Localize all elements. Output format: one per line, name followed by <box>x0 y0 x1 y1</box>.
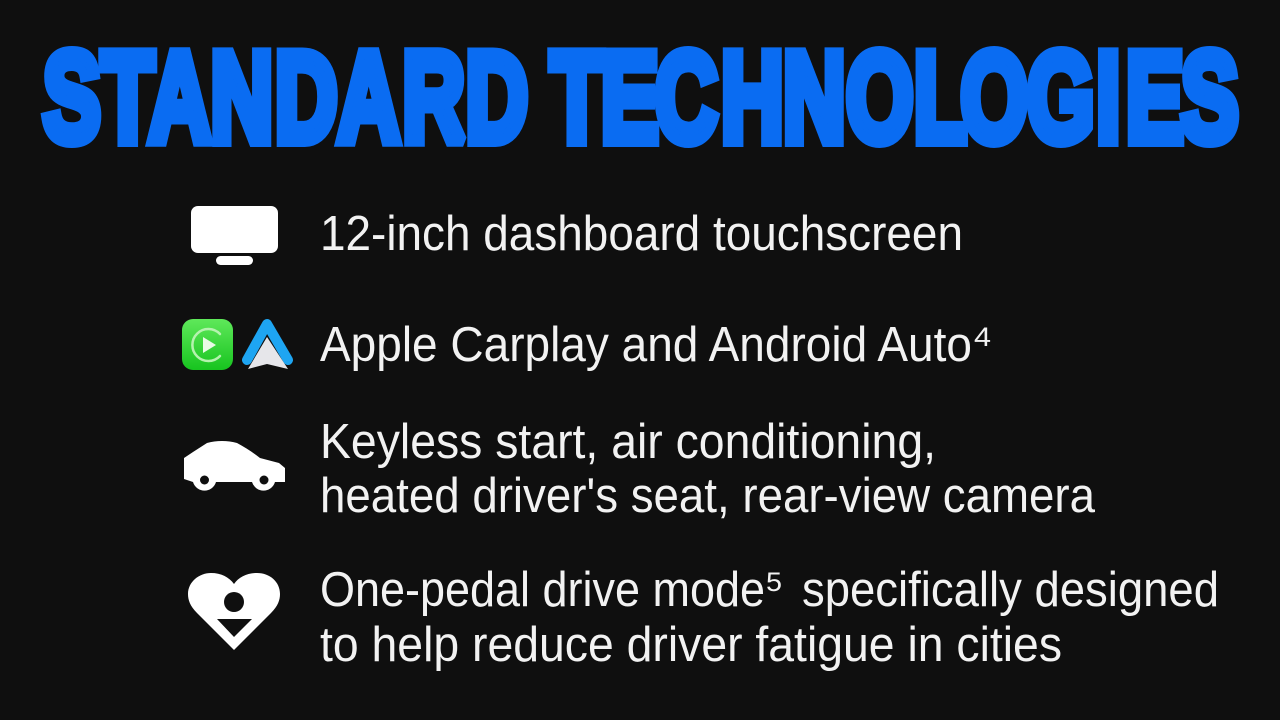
icon: car <box>184 441 285 491</box>
title: STANDARD TECHNOLOGIES <box>43 28 1239 169</box>
text: carplay and android auto: Apple Carplay and Android Auto <box>320 318 972 372</box>
text: comfort features: heated driver's seat, rear-view camera <box>320 469 1096 523</box>
text: one-pedal drive: One-pedal drive mode <box>320 563 765 617</box>
text: one-pedal drive: to help reduce driver fatigue in cities <box>320 618 1062 672</box>
icon: apple carplay <box>182 319 233 370</box>
footnote marker 4: 4 <box>974 322 991 352</box>
row: touchscreen <box>191 206 963 265</box>
icon: heart with driver <box>188 573 280 650</box>
text: one-pedal drive: 5 <box>766 567 782 597</box>
icon: touchscreen <box>191 206 278 265</box>
text: one-pedal drive <box>320 563 1219 672</box>
text: one-pedal drive: specifically designed <box>802 563 1219 617</box>
row: comfort features <box>184 415 1096 523</box>
text: comfort features <box>320 415 1096 523</box>
text: touchscreen: 12-inch dashboard touchscreen <box>320 207 963 261</box>
car wheels <box>200 476 268 484</box>
row: one-pedal drive <box>188 563 1219 672</box>
row: carplay and android auto <box>182 318 991 372</box>
icon: android auto <box>247 324 288 369</box>
text: comfort features: Keyless start, air conditioning, <box>320 415 936 469</box>
